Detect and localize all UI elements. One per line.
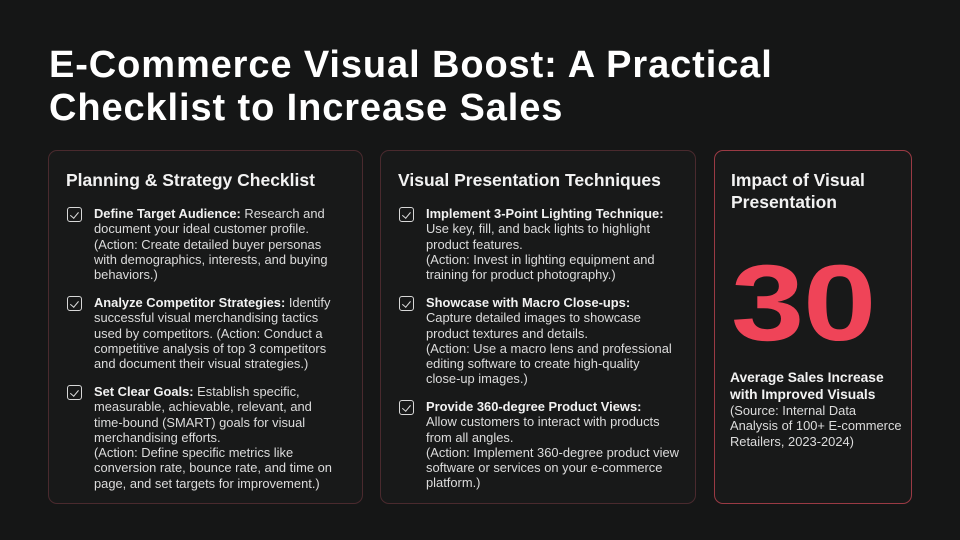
heading: techniques: Visual Presentation Techniques	[398, 170, 661, 190]
title	[49, 44, 773, 129]
item: macro close-ups: Capture detailed images to showcase	[426, 310, 641, 325]
item: lighting: Implement 3-Point Lighting Technique:	[426, 206, 664, 221]
item: define target audience	[67, 206, 328, 282]
item: macro close-ups: product textures and details.	[426, 326, 588, 341]
item: set clear goals: Set Clear Goals: Establish specific,	[94, 384, 300, 399]
item: macro close-ups: Showcase with Macro Close-ups:	[426, 295, 630, 310]
item: define target audience: with demographics, interests, and buying	[94, 252, 328, 267]
panel: visual presentation techniques	[380, 150, 696, 504]
item: 360 views: Allow customers to interact with products	[426, 414, 660, 429]
item: set clear goals: page, and set targets for improvement.)	[94, 476, 320, 491]
stat caption: with Improved Visuals	[730, 387, 875, 402]
item: set clear goals: (Action: Define specific metrics like	[94, 445, 293, 460]
item: define target audience: behaviors.)	[94, 267, 158, 282]
item: set clear goals: conversion rate, bounce rate, and time on	[94, 460, 332, 475]
item: macro close-ups: (Action: Use a macro lens and professional	[426, 341, 672, 356]
item: analyze competitors	[67, 295, 330, 371]
item: lighting: (Action: Invest in lighting equipment and	[426, 252, 655, 267]
item: define target audience: Define Target Audience: Research and	[94, 206, 325, 221]
panel: impact	[714, 150, 912, 504]
item: set clear goals: time-bound (SMART) goals for visual	[94, 415, 305, 430]
title: E-Commerce Visual Boost: A Practical	[49, 44, 773, 86]
item: macro close-ups	[399, 295, 672, 386]
heading: impact: Impact of Visual	[731, 170, 865, 190]
item: set clear goals: merchandising efforts.	[94, 430, 221, 445]
heading: planning: Planning & Strategy Checklist	[66, 170, 315, 190]
item: macro close-ups: close-up images.)	[426, 371, 528, 386]
item: set clear goals	[67, 384, 332, 491]
item: lighting: Use key, fill, and back lights to highlight	[426, 221, 650, 236]
item: macro close-ups: editing software to create high-quality	[426, 356, 640, 371]
item: analyze competitors: used by competitors. (Action: Conduct a	[94, 326, 323, 341]
stat caption: (Source: Internal Data	[730, 403, 856, 418]
item: 360 views: platform.)	[426, 475, 480, 490]
item: lighting	[399, 206, 664, 282]
title: Checklist to Increase Sales	[49, 87, 563, 129]
item: 360 views: software or services on your e-commerce	[426, 460, 662, 475]
item: 360 views	[399, 399, 679, 490]
item: lighting: training for product photography.)	[426, 267, 616, 282]
item: analyze competitors: Analyze Competitor Strategies: Identify	[94, 295, 330, 310]
item: define target audience: document your ideal customer profile.	[94, 221, 309, 236]
item: analyze competitors: competitive analysis of top 3 competitors	[94, 341, 326, 356]
stat caption: Average Sales Increase	[730, 370, 884, 385]
item: analyze competitors: successful visual merchandising tactics	[94, 310, 318, 325]
stat caption: Analysis of 100+ E-commerce	[730, 418, 902, 433]
stat caption: Retailers, 2023-2024)	[730, 434, 854, 449]
stat caption	[730, 370, 902, 449]
big stat: 30: 30	[731, 242, 875, 363]
item: define target audience: (Action: Create detailed buyer personas	[94, 237, 321, 252]
panel: planning & strategy	[48, 150, 363, 504]
heading: impact: Presentation	[731, 192, 837, 212]
item: 360 views: (Action: Implement 360-degree product view	[426, 445, 679, 460]
item: 360 views: from all angles.	[426, 430, 513, 445]
item: lighting: product features.	[426, 237, 523, 252]
item: analyze competitors: and document their visual strategies.)	[94, 356, 308, 371]
item: 360 views: Provide 360-degree Product Views:	[426, 399, 641, 414]
heading: impact	[731, 170, 865, 212]
item: set clear goals: measurable, achievable, relevant, and	[94, 399, 312, 414]
